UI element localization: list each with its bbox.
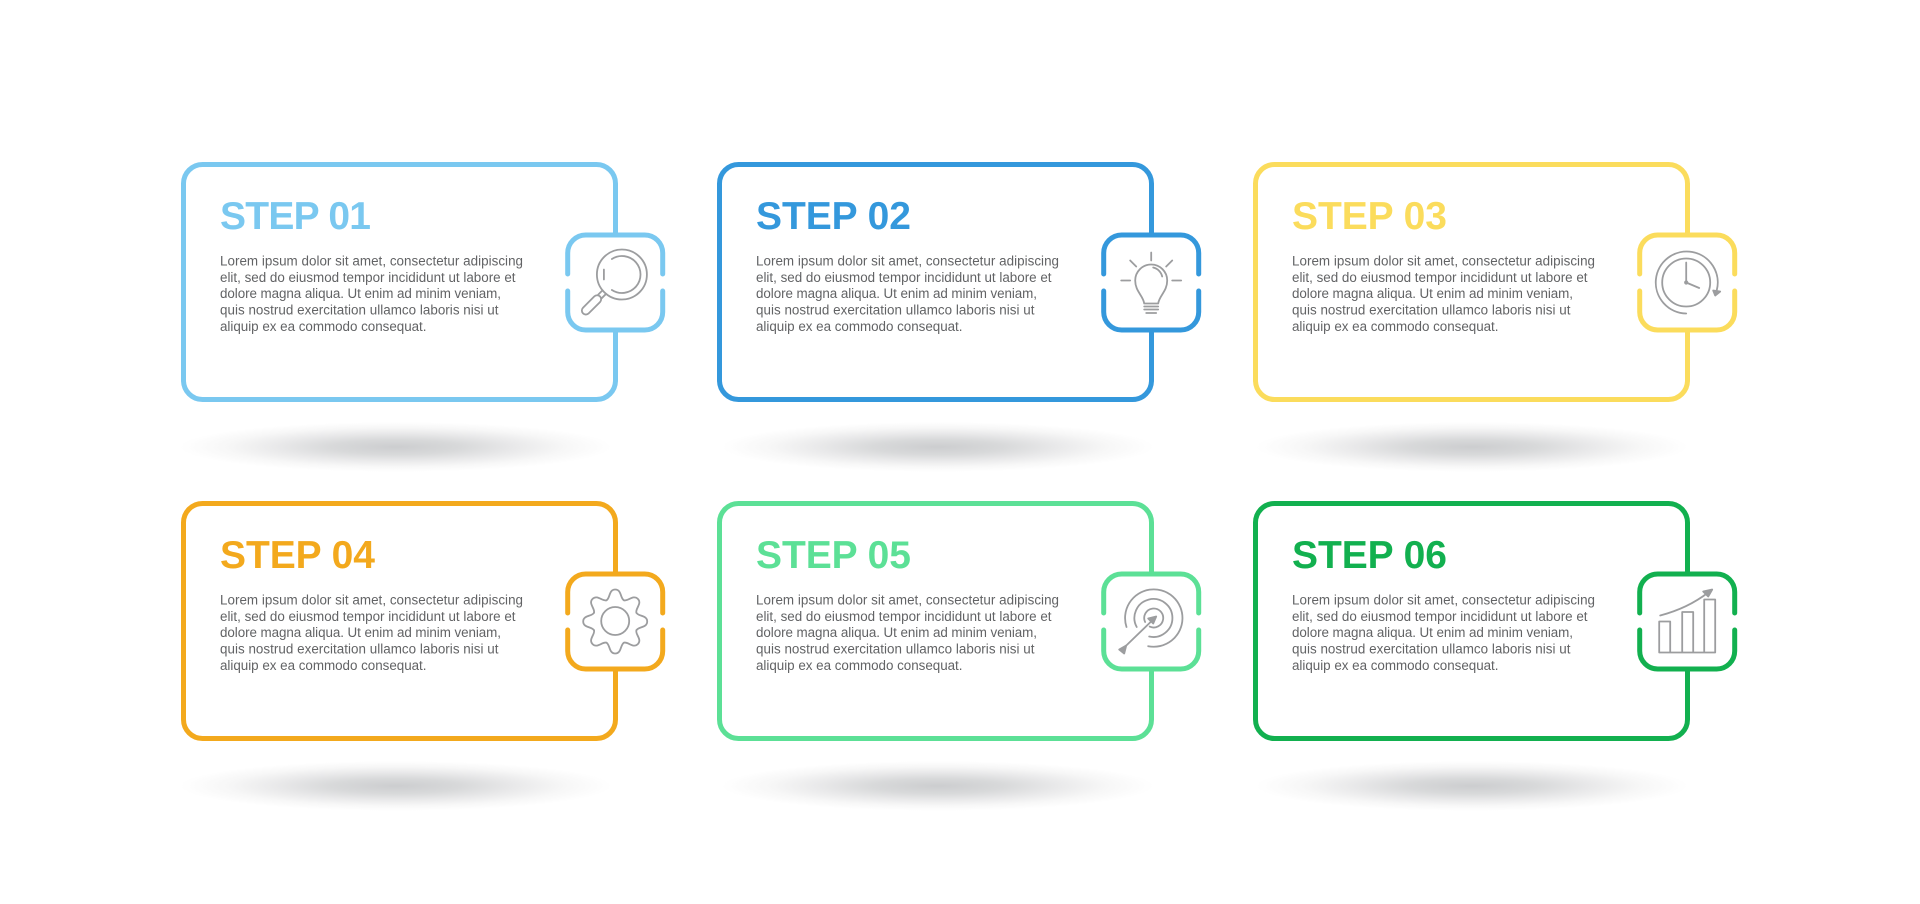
- shadow: step 01: [180, 422, 612, 472]
- heading: step 02: STEP 02: [756, 195, 911, 238]
- heading: step 04: STEP 04: [220, 534, 375, 577]
- card outline: step 03: [1256, 164, 1688, 400]
- icon frame and lightbulb icon: step 02: [1104, 235, 1199, 330]
- shadow: step 02: [722, 422, 1154, 472]
- body text: step 03: aliquip ex ea commodo consequat.: [1292, 319, 1498, 334]
- icon: clock: [1656, 252, 1720, 314]
- panel: step 03: [1256, 164, 1735, 472]
- icon: growth chart: [1659, 590, 1715, 652]
- panel: step 04: [180, 504, 663, 811]
- body text: step 03: [1292, 254, 1595, 334]
- panel: step 06: [1256, 504, 1735, 811]
- body text: step 01: Lorem ipsum dolor sit amet, consectetur adipiscing: [220, 254, 523, 268]
- shadow: step 05: [722, 761, 1154, 811]
- body text: step 01: elit, sed do eiusmod tempor incididunt ut labore et: [220, 270, 516, 285]
- panel: step 01: [180, 164, 663, 472]
- heading: step 05: STEP 05: [756, 534, 911, 577]
- card outline: step 06: [1256, 504, 1688, 738]
- card outline: step 02: [720, 164, 1152, 400]
- icon frame and growth chart icon: step 06: [1640, 574, 1735, 669]
- body text: step 05: aliquip ex ea commodo consequat.: [756, 658, 962, 673]
- body text: step 02: elit, sed do eiusmod tempor incididunt ut labore et: [756, 270, 1052, 285]
- icon frame and gear icon: step 04: [568, 574, 663, 669]
- body text: step 04: quis nostrud exercitation ullamco laboris nisi ut: [220, 642, 499, 656]
- body text: step 06: Lorem ipsum dolor sit amet, consectetur adipiscing: [1292, 592, 1595, 608]
- body text: step 05: [756, 592, 1059, 673]
- body text: step 04: dolore magna aliqua. Ut enim ad minim veniam,: [220, 625, 501, 640]
- body text: step 04: aliquip ex ea commodo consequat.: [220, 658, 426, 673]
- shadow: step 03: [1256, 422, 1688, 472]
- heading: step 06: STEP 06: [1292, 534, 1447, 577]
- body text: step 02: dolore magna aliqua. Ut enim ad minim veniam,: [756, 286, 1037, 301]
- panel: step 05: [720, 504, 1199, 811]
- body text: step 03: dolore magna aliqua. Ut enim ad minim veniam,: [1292, 286, 1573, 301]
- body text: step 05: dolore magna aliqua. Ut enim ad minim veniam,: [756, 625, 1037, 640]
- body text: step 06: elit, sed do eiusmod tempor incididunt ut labore et: [1292, 609, 1588, 624]
- icon: target with arrow: [1119, 589, 1182, 654]
- icon frame and clock icon: step 03: [1640, 235, 1735, 330]
- body text: step 04: [220, 592, 523, 673]
- body text: step 06: [1292, 592, 1595, 673]
- body text: step 01: quis nostrud exercitation ullamco laboris nisi ut: [220, 302, 499, 318]
- card outline: step 01: [184, 164, 616, 400]
- icon: gear: [583, 590, 647, 654]
- heading: step 03: STEP 03: [1292, 195, 1447, 238]
- body text: step 03: Lorem ipsum dolor sit amet, consectetur adipiscing: [1292, 254, 1595, 268]
- body text: step 02: [756, 254, 1059, 334]
- body text: step 01: [220, 254, 523, 334]
- body text: step 06: aliquip ex ea commodo consequat.: [1292, 658, 1498, 673]
- body text: step 02: aliquip ex ea commodo consequat.: [756, 319, 962, 334]
- body text: step 04: elit, sed do eiusmod tempor incididunt ut labore et: [220, 609, 516, 624]
- icon: magnifier: [580, 250, 647, 316]
- heading: step 01: STEP 01: [220, 195, 371, 238]
- shadow: step 04: [180, 761, 612, 811]
- card outline: step 05: [720, 504, 1152, 738]
- body text: step 05: Lorem ipsum dolor sit amet, consectetur adipiscing: [756, 592, 1059, 608]
- body text: step 03: quis nostrud exercitation ullamco laboris nisi ut: [1292, 302, 1571, 318]
- body text: step 05: quis nostrud exercitation ullamco laboris nisi ut: [756, 642, 1035, 656]
- body text: step 01: dolore magna aliqua. Ut enim ad minim veniam,: [220, 286, 501, 301]
- icon frame and target icon: step 05: [1104, 574, 1199, 669]
- body text: step 02: Lorem ipsum dolor sit amet, consectetur adipiscing: [756, 254, 1059, 268]
- panel: step 02: [720, 164, 1199, 472]
- body text: step 05: elit, sed do eiusmod tempor incididunt ut labore et: [756, 609, 1052, 624]
- body text: step 06: quis nostrud exercitation ullamco laboris nisi ut: [1292, 642, 1571, 656]
- icon frame and magnifier icon: step 01: [568, 235, 663, 330]
- icon: lightbulb: [1121, 252, 1181, 313]
- body text: step 06: dolore magna aliqua. Ut enim ad minim veniam,: [1292, 625, 1573, 640]
- shadow: step 06: [1256, 761, 1688, 811]
- body text: step 03: elit, sed do eiusmod tempor incididunt ut labore et: [1292, 270, 1588, 285]
- card outline: step 04: [184, 504, 616, 738]
- body text: step 04: Lorem ipsum dolor sit amet, consectetur adipiscing: [220, 592, 523, 608]
- body text: step 01: aliquip ex ea commodo consequat.: [220, 319, 426, 334]
- body text: step 02: quis nostrud exercitation ullamco laboris nisi ut: [756, 302, 1035, 318]
